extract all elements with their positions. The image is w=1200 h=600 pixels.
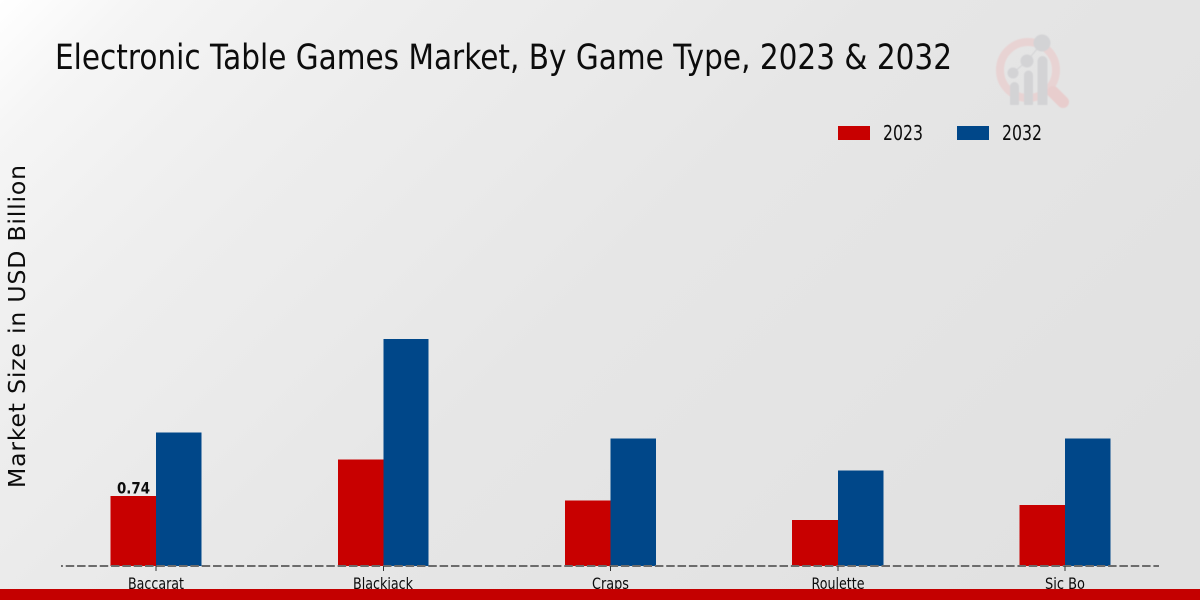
axis ticks: [156, 566, 1065, 571]
bar chart: [61, 339, 1159, 593]
bars: Baccarat: [110, 432, 202, 566]
legend swatch 2032: [957, 126, 989, 140]
y axis title: Market Size in USD Billion: [3, 165, 31, 488]
x axis labels: Baccarat: [128, 574, 184, 593]
legend label 2023: 2023: [883, 121, 923, 145]
bars: Craps: [565, 438, 656, 566]
x axis labels: Craps: [592, 574, 629, 593]
icon: watermark logo: [1000, 34, 1063, 105]
bottom red band: [0, 589, 1200, 600]
legend swatch 2023: [838, 126, 870, 140]
x axis labels: Blackjack: [353, 574, 414, 593]
legend: [838, 121, 1042, 145]
bars: Sic Bo: [1020, 438, 1110, 566]
x axis labels: Sic Bo: [1045, 574, 1085, 593]
bars: Blackjack: [338, 339, 428, 566]
legend label 2032: 2032: [1002, 121, 1042, 145]
baseline: [61, 565, 1159, 567]
value label 0.74: 0.74: [117, 478, 150, 497]
x axis labels: Roulette: [812, 574, 864, 593]
bars: Roulette: [792, 470, 884, 566]
title: Electronic Table Games Market, By Game Type, 2023 & 2032: [55, 38, 952, 78]
x axis labels: [128, 574, 1085, 593]
